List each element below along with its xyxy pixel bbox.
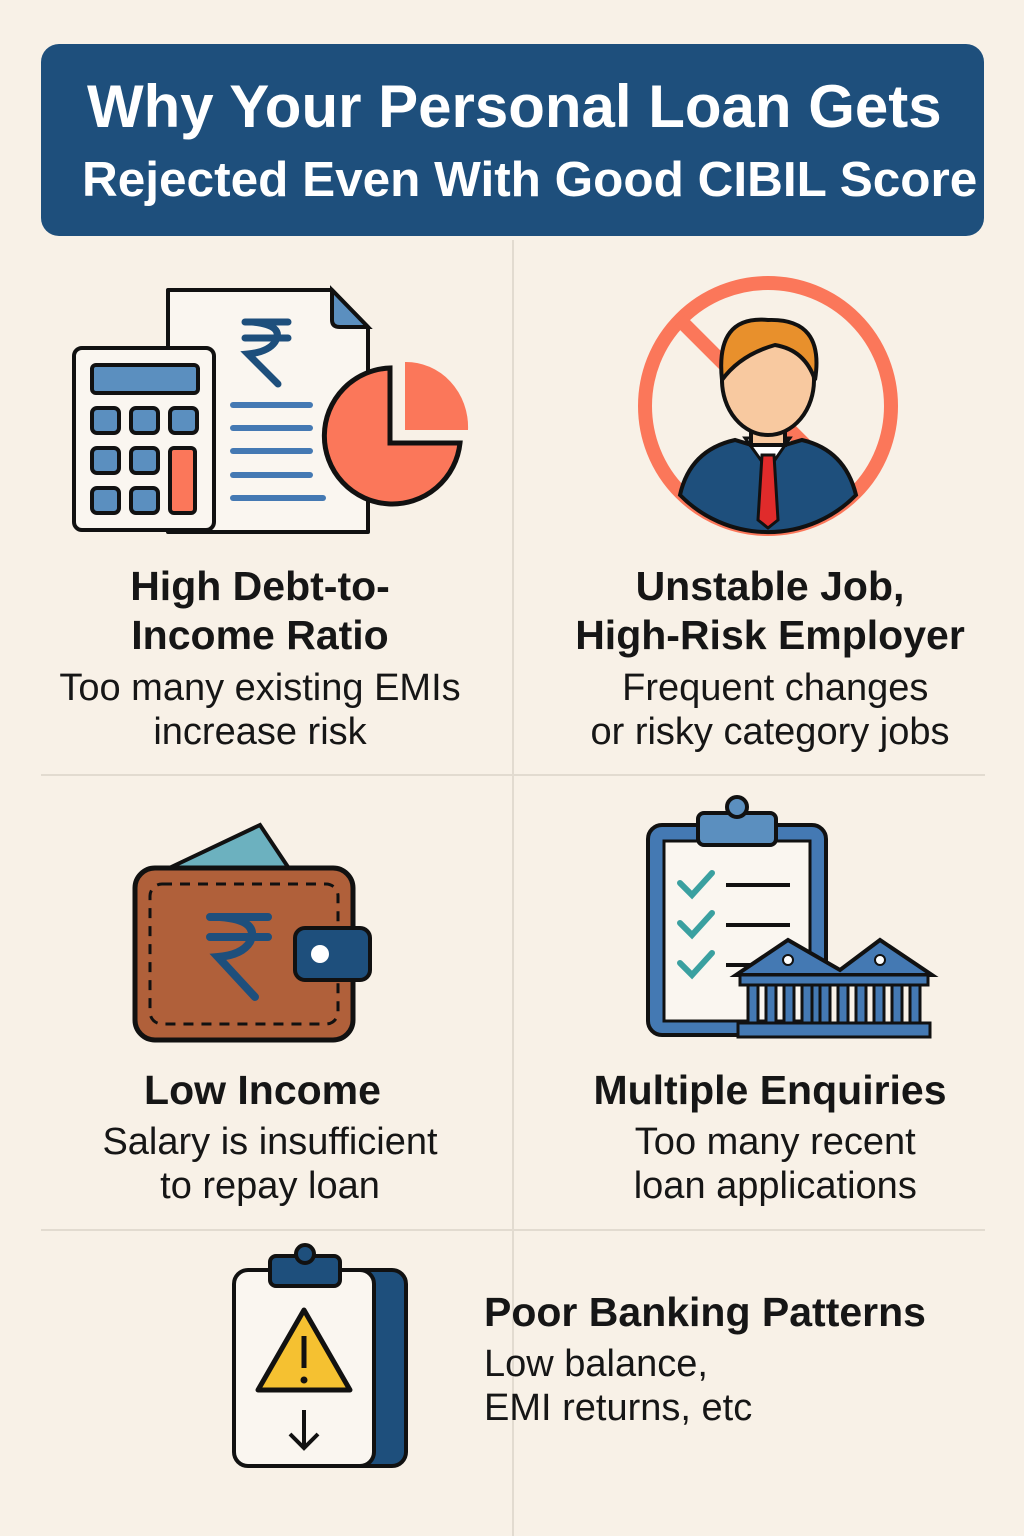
text: low income: Salary is insufficient [102,1121,438,1163]
heading: poor banking patterns: Poor Banking Patterns [484,1289,926,1335]
text: debt to income [59,667,461,753]
heading: multiple enquiries: Multiple Enquiries [593,1067,947,1113]
title banner: Rejected Even With Good CIBIL Score [82,152,977,207]
icon: prohibited employee [638,276,898,536]
icon: calculator, document, pie chart [72,285,468,534]
text: multiple enquiries: loan applications [634,1165,917,1207]
text: unstable job: or risky category jobs [590,711,950,753]
heading: unstable job: Unstable Job, [636,563,904,609]
text: low income [102,1121,438,1207]
heading: debt to income: High Debt-to- [130,563,390,609]
text: multiple enquiries: Too many recent [635,1121,916,1163]
text: poor banking patterns: Low balance, [484,1343,708,1385]
icon: clipboard warning [232,1243,408,1468]
text: multiple enquiries [634,1121,917,1207]
icon: checklist and bank [646,795,938,1038]
heading: debt to income: Income Ratio [131,612,389,658]
title banner [41,44,984,236]
text: poor banking patterns: EMI returns, etc [484,1387,752,1429]
text: debt to income: Too many existing EMIs [59,667,461,709]
text: unstable job: Frequent changes [622,667,928,709]
heading: low income: Low Income [144,1067,381,1113]
text: debt to income: increase risk [153,711,367,753]
text: poor banking patterns [484,1343,752,1429]
heading: debt to income [130,563,390,658]
heading: unstable job [575,563,965,658]
heading: unstable job: High-Risk Employer [575,612,965,658]
icon: wallet [132,822,372,1042]
text: low income: to repay loan [160,1165,380,1207]
text: unstable job [590,667,950,753]
title banner: Why Your Personal Loan Gets [87,73,942,140]
